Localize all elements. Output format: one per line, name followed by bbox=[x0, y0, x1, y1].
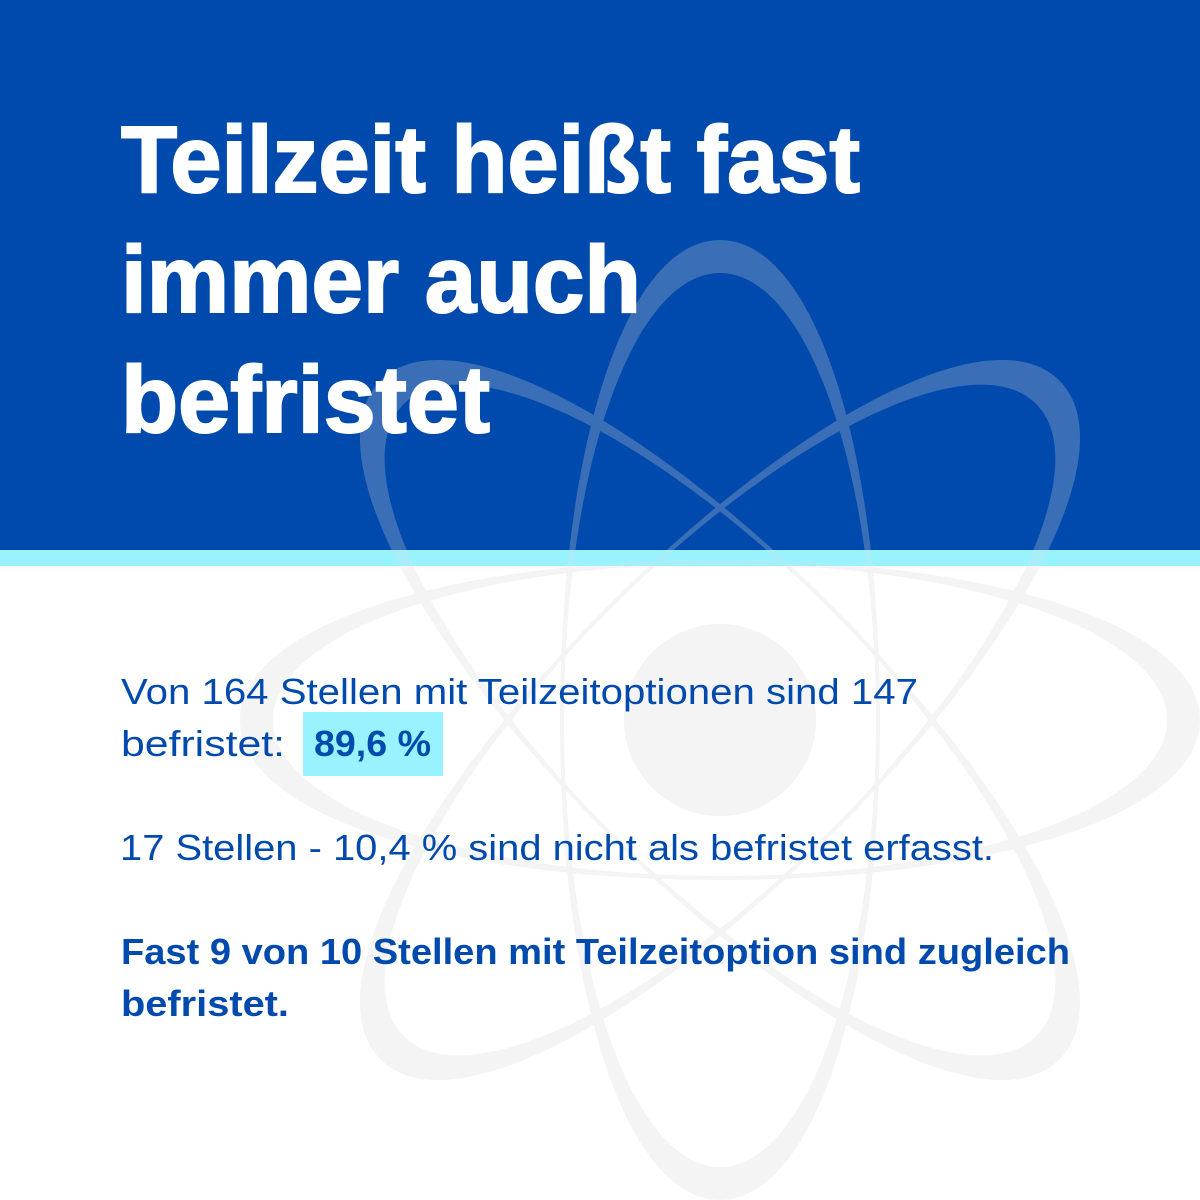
header panel bbox=[0, 0, 1200, 550]
title: immer auch bbox=[121, 227, 641, 333]
text block: share of fixed-term positions: Von 164 Stellen mit Teilzeitoptionen sind 147 bbox=[121, 671, 918, 712]
accent band bbox=[0, 550, 1200, 566]
text block: share of fixed-term positions bbox=[121, 671, 918, 764]
background atom icon bbox=[240, 240, 1200, 1200]
highlighted figure: 89,6 % bbox=[303, 712, 443, 776]
text block: conclusion: befristet. bbox=[121, 983, 289, 1024]
highlighted figure: 89,6 %: 89,6 % bbox=[314, 723, 431, 764]
text block: not fixed-term positions: 17 Stellen - 10,4 % sind nicht als befristet erfasst. bbox=[120, 827, 994, 868]
title bbox=[121, 107, 860, 453]
title: Teilzeit heißt fast bbox=[121, 107, 860, 213]
text block: conclusion bbox=[121, 931, 1070, 1024]
text block: share of fixed-term positions: befristet: bbox=[121, 723, 285, 764]
text block: conclusion: Fast 9 von 10 Stellen mit Teilzeitoption sind zugleich bbox=[121, 931, 1070, 972]
title: befristet bbox=[121, 347, 490, 453]
